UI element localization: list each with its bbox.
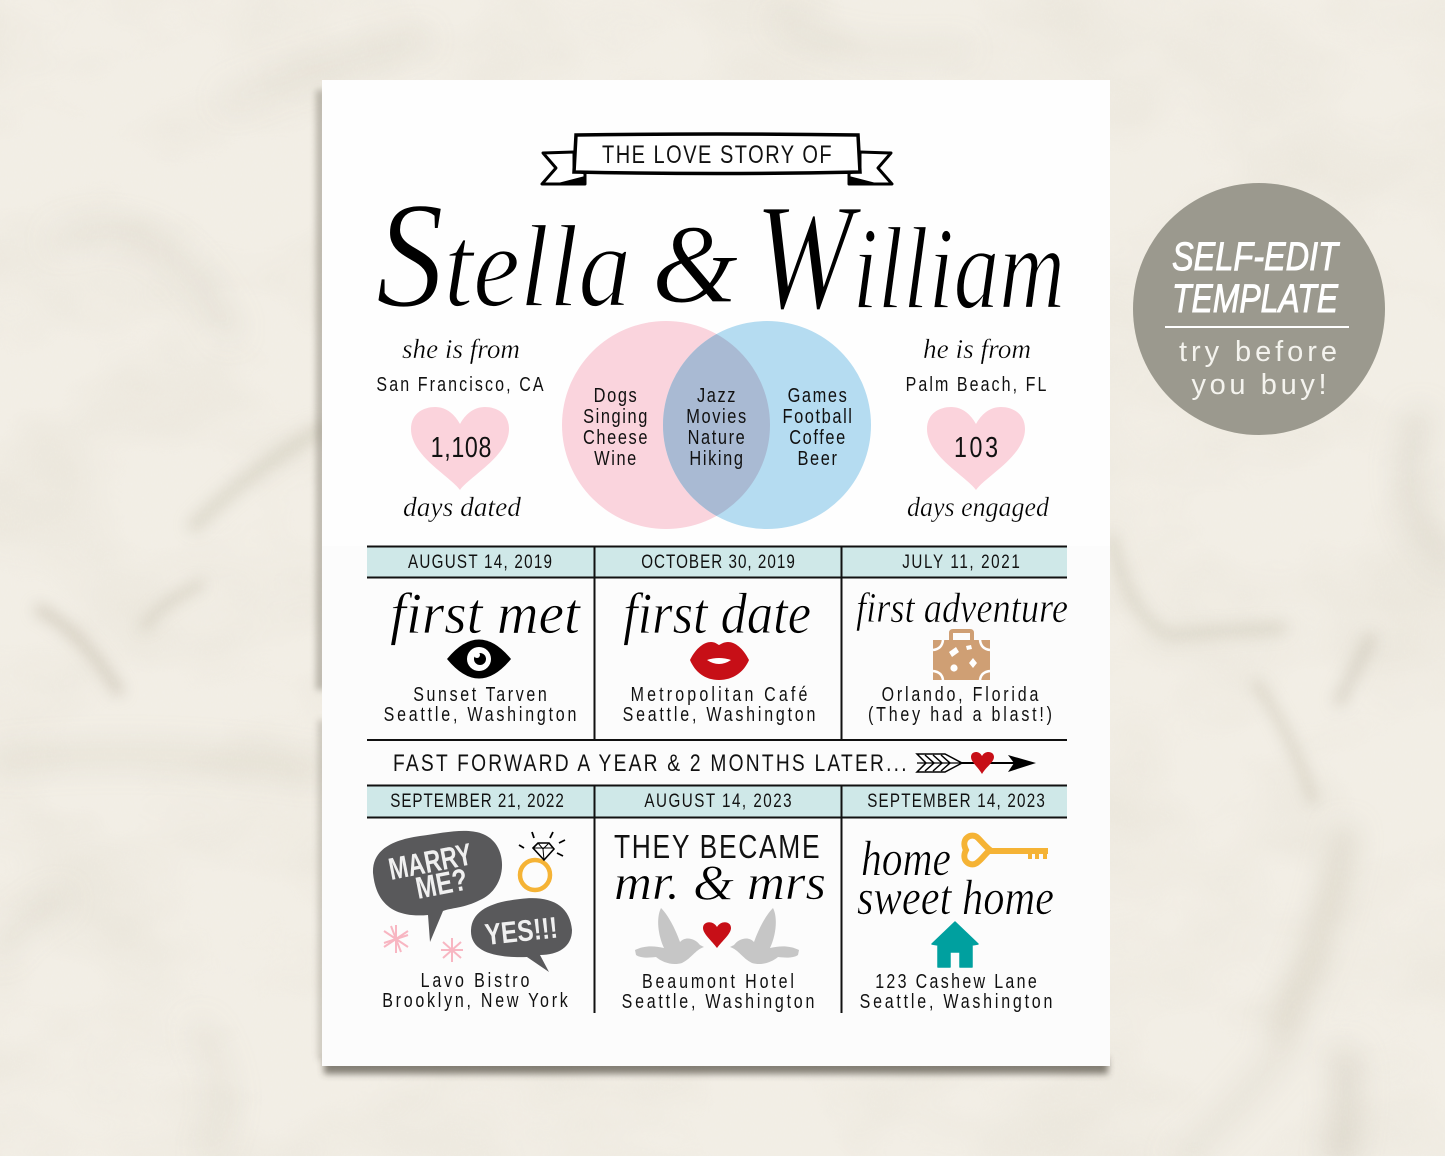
- date: august 14 2019: AUGUST 14, 2019: [408, 550, 552, 572]
- date: august 14 2023: AUGUST 14, 2023: [644, 789, 792, 811]
- venn right list: [782, 383, 854, 469]
- right column: he is from: days engaged: [907, 492, 1049, 522]
- icon: diamond ring: [519, 832, 565, 890]
- heading: mr and mrs: mr. & mrs: [614, 854, 826, 910]
- venn right list: Games: [788, 383, 848, 406]
- badge: self-edit template: TEMPLATE: [1172, 277, 1339, 321]
- date: october 30 2019: OCTOBER 30, 2019: [641, 550, 795, 572]
- icon: pink heart with days engaged: 103: [954, 430, 998, 464]
- venue: first met: Sunset Tarven: [413, 683, 547, 705]
- venue: new home: 123 Cashew Lane: [875, 970, 1037, 992]
- badge: self-edit template: try before: [1179, 336, 1337, 368]
- heading: first met: first met: [390, 581, 582, 646]
- icon: arrow with heart: [917, 752, 1036, 774]
- paper sheet: [316, 80, 1110, 1074]
- title: names: [376, 171, 1065, 341]
- left column: she is from: days dated: [403, 492, 521, 522]
- speech bubble: marry me: [373, 831, 502, 942]
- badge: self-edit template: you buy!: [1192, 369, 1326, 401]
- venue: first adventure: (They had a blast!): [868, 703, 1052, 725]
- icon: pink heart with days dated: 1,108: [431, 430, 491, 464]
- venn middle list: Hiking: [689, 446, 745, 469]
- right column: he is from: [906, 334, 1049, 522]
- speech bubble: marry me: MARRY: [386, 836, 475, 887]
- badge: self-edit template: [1133, 183, 1385, 435]
- icon: doves and heart: [635, 908, 799, 964]
- speech bubble: yes: YES!!!: [483, 912, 559, 952]
- venn middle list: [686, 383, 748, 469]
- icon: eye: [447, 640, 511, 678]
- banner text: THE LOVE STORY OF: [602, 141, 832, 169]
- left column: she is from: she is from: [402, 334, 520, 364]
- timeline row 2: [367, 785, 1067, 1013]
- venue: first met: [384, 683, 576, 725]
- venn left list: Cheese: [583, 425, 649, 448]
- venue: wedding: Seattle, Washington: [622, 990, 814, 1012]
- venue: marry me: [382, 969, 569, 1011]
- venue: first met: Seattle, Washington: [384, 703, 576, 725]
- left column: she is from: [376, 334, 544, 522]
- venn diagram: [562, 321, 871, 529]
- venn left list: Singing: [583, 404, 649, 427]
- icon: red lips: [690, 642, 749, 680]
- right column: he is from: Palm Beach, FL: [906, 373, 1046, 395]
- fast forward strip: FAST FORWARD A YEAR & 2 MONTHS LATER...: [393, 749, 907, 777]
- venn right list: Beer: [797, 446, 839, 469]
- venn middle list: Jazz: [697, 383, 737, 406]
- heading: sweet home: sweet home: [857, 869, 1054, 925]
- heading: first adventure: first adventure: [856, 586, 1068, 632]
- venue: marry me: Lavo Bistro: [421, 969, 529, 991]
- heading: they became: THEY BECAME: [614, 829, 820, 866]
- icon: pink heart with days engaged: [927, 407, 1025, 490]
- icon: pink sparkles: [384, 925, 463, 962]
- venue: first date: [623, 683, 815, 725]
- icon: teal house: [932, 922, 978, 967]
- badge: self-edit template: SELF-EDIT: [1172, 235, 1340, 279]
- timeline row 1: [367, 546, 1068, 740]
- icon: pink heart with days dated: [411, 407, 509, 490]
- venue: first adventure: Orlando, Florida: [882, 683, 1039, 705]
- speech bubble: yes: [471, 898, 572, 972]
- title: names: William: [755, 173, 1065, 341]
- venn left list: [583, 383, 649, 469]
- left column: she is from: San Francisco, CA: [376, 373, 544, 395]
- icon: gold key: [964, 836, 1048, 864]
- banner: the love story of: [542, 134, 892, 185]
- date: september 21 2022: SEPTEMBER 21, 2022: [390, 789, 564, 811]
- venn middle list: Nature: [688, 425, 746, 448]
- icon: suitcase: [933, 631, 990, 680]
- venue: first date: Seattle, Washington: [623, 703, 815, 725]
- heading: home: home: [861, 830, 951, 886]
- venn right list: Football: [782, 404, 854, 427]
- date: july 11 2021: JULY 11, 2021: [902, 550, 1020, 572]
- venue: new home: Seattle, Washington: [860, 990, 1052, 1012]
- venn left list: Wine: [594, 446, 638, 469]
- title: names: Stella: [376, 171, 631, 339]
- date: september 14 2023: SEPTEMBER 14, 2023: [867, 789, 1045, 811]
- venue: first date: Metropolitan Café: [631, 683, 807, 705]
- venue: new home: [860, 970, 1052, 1012]
- venn left list: Dogs: [594, 383, 638, 406]
- heading: first date: first date: [623, 581, 811, 646]
- venue: wedding: [622, 970, 814, 1012]
- venue: marry me: Brooklyn, New York: [382, 989, 569, 1011]
- title: names: &: [652, 203, 738, 327]
- speech bubble: marry me: ME?: [413, 862, 470, 906]
- venn right list: Coffee: [789, 425, 847, 448]
- venn middle list: Movies: [686, 404, 748, 427]
- right column: he is from: he is from: [923, 334, 1031, 364]
- venue: wedding: Beaumont Hotel: [642, 970, 794, 992]
- venue: first adventure: [868, 683, 1052, 725]
